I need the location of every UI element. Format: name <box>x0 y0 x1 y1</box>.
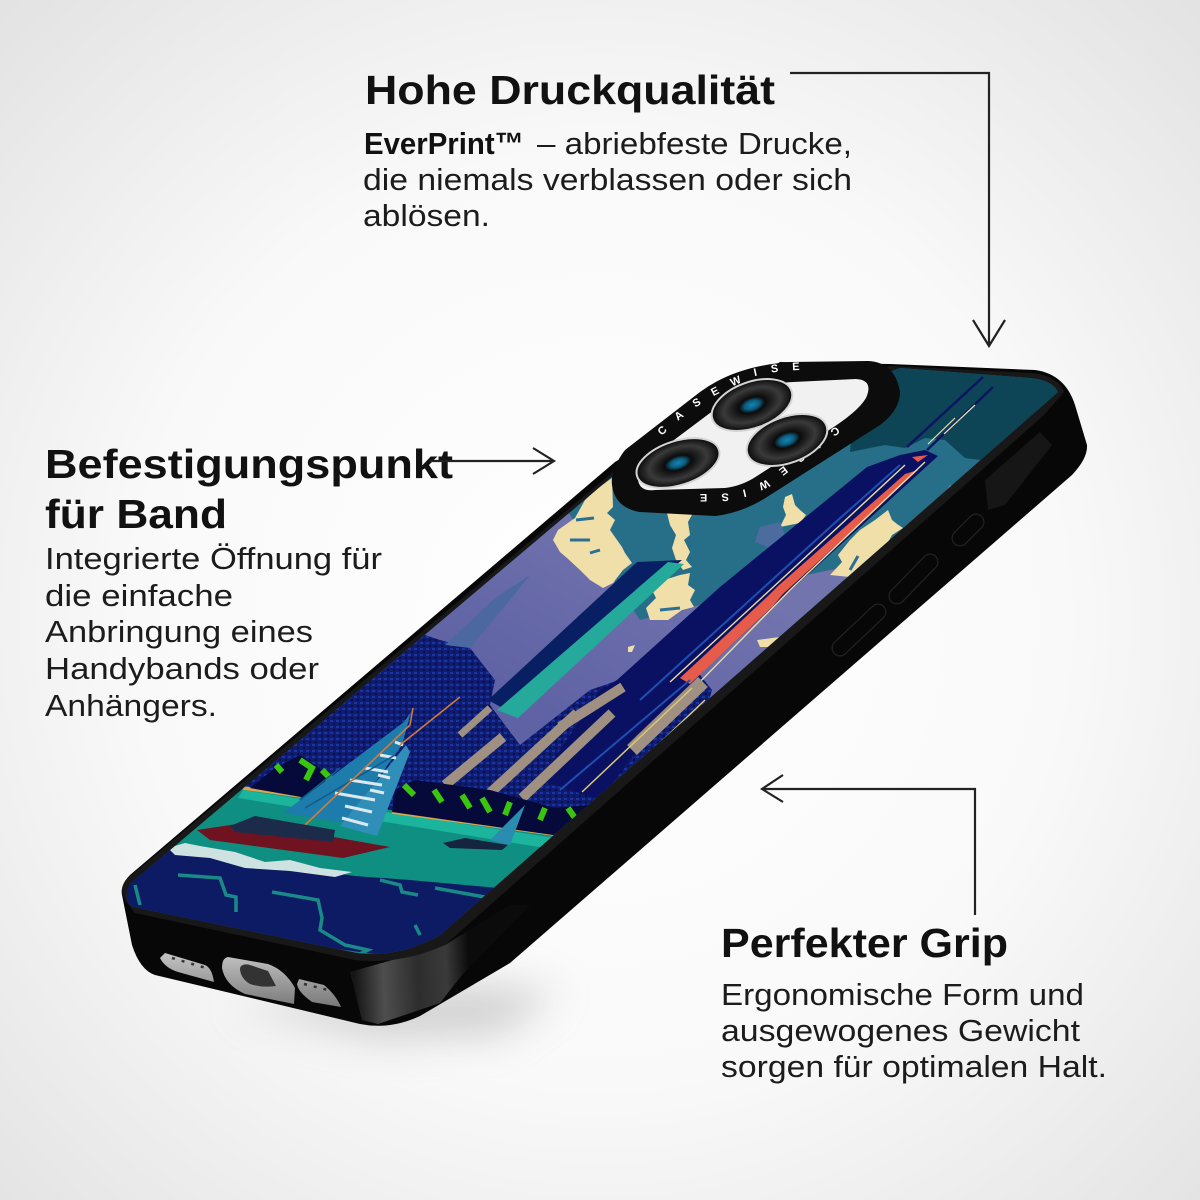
description: EverPrint™ <box>364 126 524 161</box>
description: Anbringung eines <box>45 614 313 649</box>
camera island <box>612 361 900 516</box>
teal-striped tower <box>488 560 684 718</box>
tan building stripes <box>445 682 703 798</box>
description: die einfache <box>45 578 233 613</box>
description: – abriebfeste Drucke, <box>537 126 852 161</box>
phone case body <box>122 362 1087 1026</box>
phone with printed case <box>122 361 1088 1026</box>
brand text: CASEWISE <box>658 362 800 434</box>
description: Anhängers. <box>45 688 217 723</box>
heading: Befestigungspunkt <box>45 441 453 487</box>
lenses <box>630 369 834 497</box>
description: ausgewogenes Gewicht <box>721 1013 1080 1048</box>
bottom corner highlight <box>350 905 530 1024</box>
front bezel <box>122 366 1064 961</box>
cloud details <box>570 518 858 610</box>
phone shadow <box>230 985 560 1040</box>
description: Handybands oder <box>45 651 319 686</box>
arrow: grip <box>762 775 975 915</box>
small boat <box>443 805 525 850</box>
description: die niemals verblassen oder sich <box>363 162 852 197</box>
description <box>45 541 382 723</box>
heading: Perfekter Grip <box>721 920 1008 966</box>
horizon line <box>243 788 560 835</box>
shore trees <box>250 755 590 836</box>
side buttons <box>840 432 1052 648</box>
deep water <box>126 849 494 954</box>
camera island: CASEWISE <box>700 428 839 502</box>
description <box>721 977 1107 1084</box>
arrow: print quality <box>790 73 1005 346</box>
heading: Hohe Druckqualität <box>365 67 775 113</box>
description: ablösen. <box>363 198 490 233</box>
description <box>363 126 852 233</box>
callout: print quality <box>363 67 852 233</box>
clouds <box>553 478 903 652</box>
description: Ergonomische Form und <box>721 977 1084 1012</box>
building mass <box>225 630 712 840</box>
camera glass <box>638 379 868 490</box>
arrow: strap attachment <box>430 448 554 474</box>
wave lines <box>135 875 490 955</box>
heading <box>45 441 453 537</box>
sky <box>126 368 1058 954</box>
boat wake <box>168 843 352 877</box>
main tower with red stripe <box>540 377 993 800</box>
printed artwork <box>126 368 1058 954</box>
sailboat <box>197 697 460 858</box>
heading: für Band <box>45 491 227 537</box>
callout: strap attachment <box>45 441 453 723</box>
callout: grip <box>721 920 1107 1084</box>
water <box>170 788 554 890</box>
left spire <box>445 575 530 648</box>
description: sorgen für optimalen Halt. <box>721 1049 1107 1084</box>
bottom ports <box>160 953 341 1007</box>
description: Integrierte Öffnung für <box>45 541 382 576</box>
lavender sky <box>380 485 1000 760</box>
lower tower lines <box>582 688 705 800</box>
